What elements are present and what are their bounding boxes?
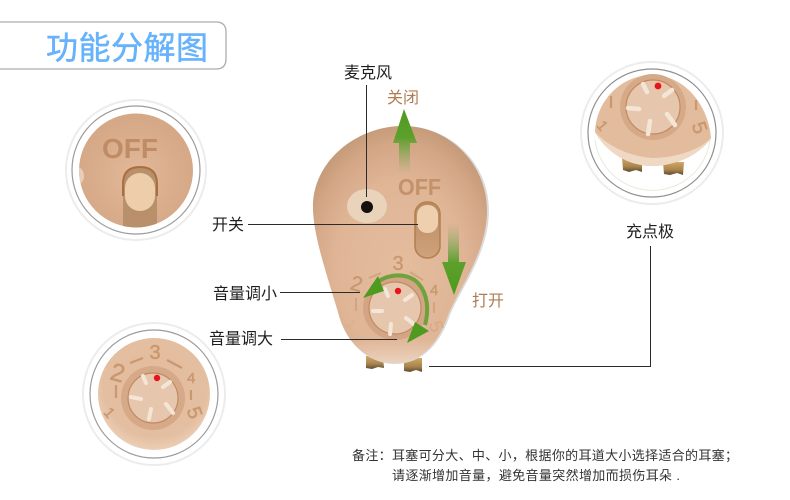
dial numerals: 4: [430, 282, 438, 299]
footnote: 请逐渐增加音量，避免音量突然增加而损伤耳朵 .: [392, 468, 680, 483]
volume dial: [343, 253, 447, 340]
contact numerals: 5: [687, 119, 711, 137]
dial numerals: 5: [182, 404, 206, 422]
zoom circle: volume dial: [83, 323, 225, 465]
dial numerals: [343, 253, 447, 335]
contact numerals: [593, 117, 711, 137]
hearing aid body: [313, 126, 489, 372]
dial numerals: 1: [343, 316, 359, 332]
labels: 麦克风: [344, 64, 392, 82]
contact pins: [366, 356, 422, 372]
dial numerals: 2: [107, 358, 128, 389]
labels: [209, 64, 674, 348]
OFF label: OFF: [398, 174, 441, 200]
leader lines: [248, 85, 650, 366]
arrow up: close: [393, 109, 417, 173]
slider switch: [415, 202, 440, 258]
dial numerals: [100, 342, 206, 422]
arrow down: open: [442, 223, 466, 295]
dial numerals: 4: [187, 370, 195, 387]
labels: 音量调小: [213, 285, 277, 303]
dial numerals: 1: [100, 404, 118, 422]
dial numerals: 3: [149, 342, 161, 364]
contact numerals: 1: [593, 117, 611, 135]
footnote: [352, 448, 738, 483]
zoom circle: off switch: [66, 100, 206, 240]
charging pins: [622, 158, 684, 175]
labels: 开关: [212, 216, 244, 234]
zoom circle: charging contacts: [581, 62, 723, 204]
labels: 充点极: [626, 223, 674, 241]
dial numerals: 3: [392, 253, 404, 275]
action labels: [387, 89, 504, 310]
title: 功能分解图: [46, 30, 208, 66]
action labels: 打开: [472, 292, 504, 310]
title box: [0, 22, 226, 69]
action labels: 关闭: [387, 89, 419, 107]
rotation arrow: [363, 275, 429, 343]
labels: 音量调大: [209, 330, 273, 348]
microphone: [347, 189, 387, 223]
footnote: 备注：耳塞可分大、中、小，根据你的耳道大小选择适合的耳塞；: [352, 448, 738, 464]
dial numerals: 5: [424, 318, 447, 335]
dial numerals: 2: [348, 272, 365, 297]
zoom OFF label: OFF: [102, 133, 158, 164]
